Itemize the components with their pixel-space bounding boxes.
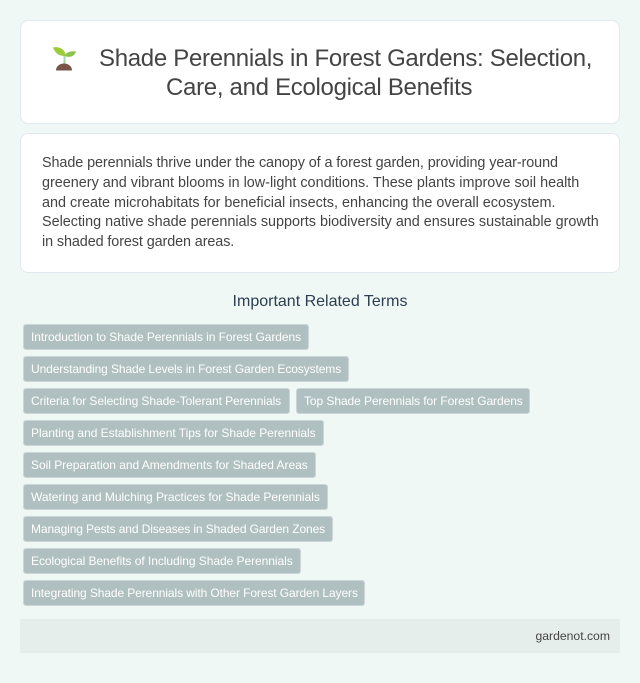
heading: related terms: Important Related Terms [233,293,407,310]
intro paragraph: Selecting native shade perennials supports biodiversity and ensures sustainable growth [42,214,599,230]
chip: Integrating Shade Perennials with Other Forest Garden Layers [31,586,358,600]
chip: Criteria for Selecting Shade-Tolerant Perennials [31,394,281,408]
title second line: Care, and Ecological Benefits [166,74,472,101]
panel: intro text [20,133,620,273]
chip: Introduction to Shade Perennials in Forest Gardens [31,330,301,344]
chip [296,388,530,414]
title: Shade Perennials in Forest Gardens: Selection, [99,45,592,72]
intro paragraph: in shaded forest garden areas. [42,234,234,250]
footer bar [20,619,620,653]
footer source: gardenot.com [535,629,610,643]
chip [23,516,333,542]
chip [23,356,349,382]
chip: Ecological Benefits of Including Shade Perennials [31,554,293,568]
intro paragraph: Shade perennials thrive under the canopy of a forest garden, providing year-round [42,155,558,171]
intro paragraph: and create microhabitats for beneficial insects, enhancing the overall ecosystem. [42,195,556,211]
panel: title card [20,20,620,124]
chip [23,580,365,606]
chip: Soil Preparation and Amendments for Shaded Areas [31,458,308,472]
chip: Understanding Shade Levels in Forest Garden Ecosystems [31,362,341,376]
chip [23,548,301,574]
icon: seedling [53,47,76,70]
chip: Top Shade Perennials for Forest Gardens [304,394,523,408]
chip: Managing Pests and Diseases in Shaded Garden Zones [31,522,325,536]
intro paragraph [42,155,599,250]
term chips [23,324,530,606]
chip [23,324,309,350]
intro paragraph: greenery and vibrant blooms in low-light conditions. These plants improve soil health [42,175,579,191]
chip: Planting and Establishment Tips for Shade Perennials [31,426,316,440]
chip [23,420,324,446]
chip [23,452,316,478]
chip [23,484,328,510]
chip: Watering and Mulching Practices for Shade Perennials [31,490,320,504]
chip [23,388,290,414]
